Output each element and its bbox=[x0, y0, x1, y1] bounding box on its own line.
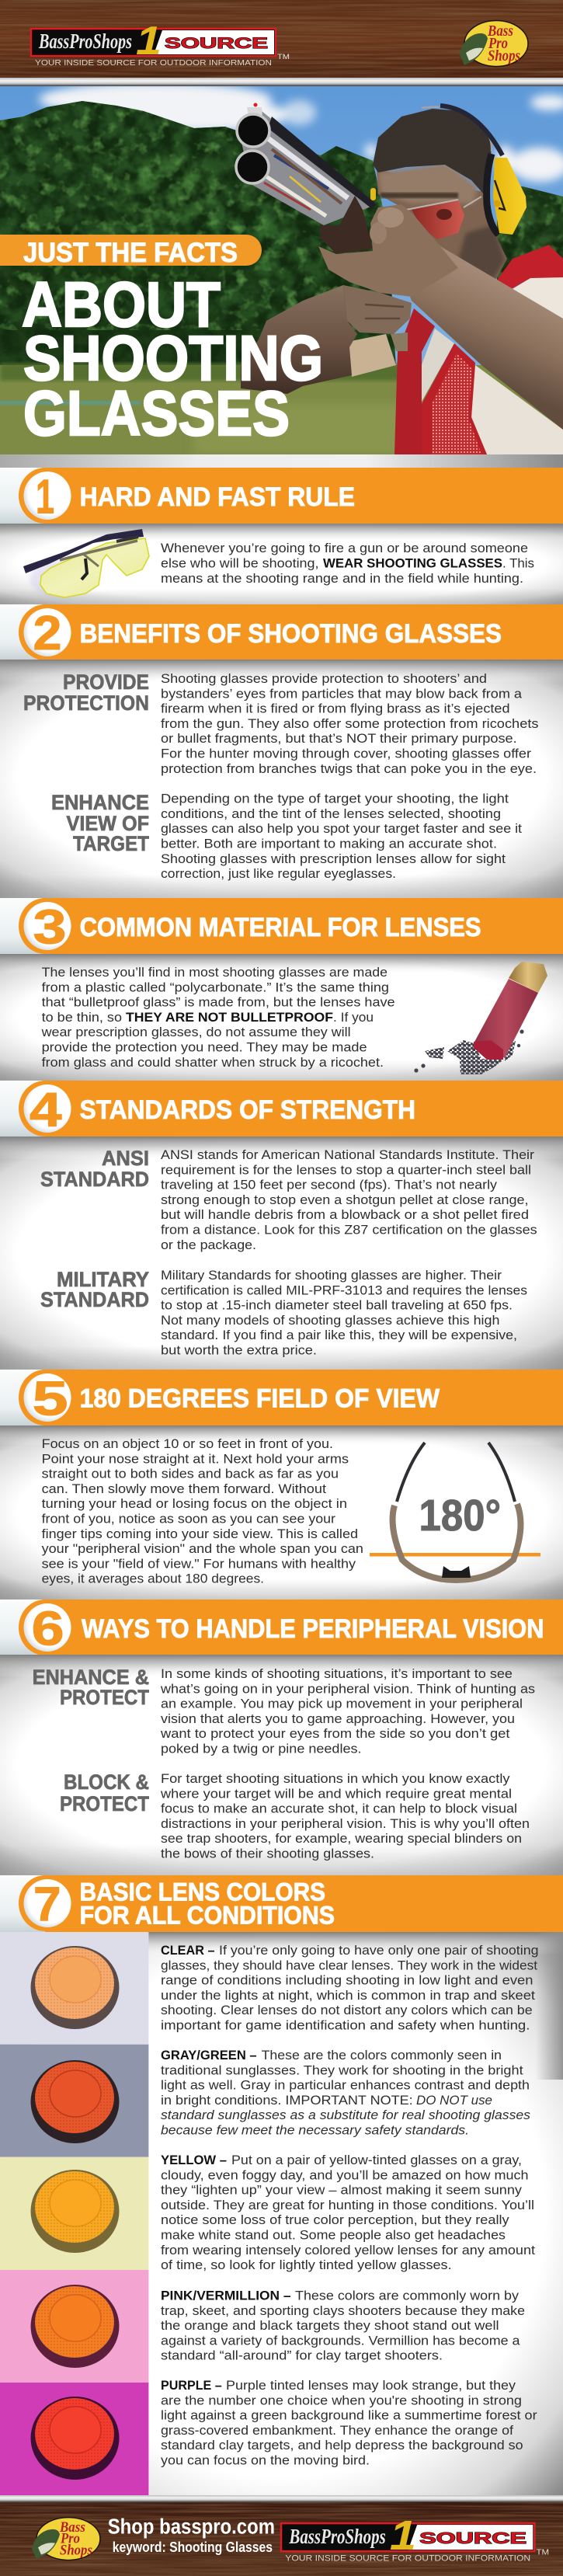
icon: top view of glasses showing 180 degrees: 180° bbox=[419, 1491, 501, 1540]
text block: purple: Purple tinted lenses may look strange, but they bbox=[226, 2379, 516, 2393]
header wood banner bbox=[0, 0, 563, 78]
section 7 heading: basic lens colors for all conditions: FOR ALL CONDITIONS bbox=[80, 1902, 335, 1930]
shooter head with ear protection and glasses bbox=[370, 106, 527, 282]
swatch: yellow bbox=[0, 2157, 148, 2270]
text block: military bbox=[161, 1269, 527, 1358]
text block: yellow: make white stand out. Some people also get headaches bbox=[161, 2228, 506, 2242]
text block: from a plastic called “polycarbonate.” It’s the same thing bbox=[42, 980, 389, 994]
text block: pink vermillion: against a variety of backgrounds. Vermillion has become a bbox=[161, 2334, 520, 2348]
Bass Pro Shops oval logo bbox=[460, 20, 528, 67]
text block: block and protect: see trap shooters, for example, wearing special blinders on bbox=[161, 1832, 522, 1846]
text block: gray green: in bright conditions. IMPORTANT NOTE: bbox=[161, 2094, 413, 2108]
shooter left arm and hand bbox=[241, 285, 412, 394]
text block: enhance view of target: Depending on the type of target your shooting, the light bbox=[161, 792, 509, 806]
panel: common material bbox=[0, 954, 563, 1081]
text block bbox=[161, 541, 534, 586]
text block: enhance view of target: conditions, and the tint of the lenses selected, shooting bbox=[161, 807, 501, 821]
text block: WEAR SHOOTING GLASSES bbox=[323, 556, 502, 570]
text block: purple: standard clay targets, and help depress the background so bbox=[161, 2438, 523, 2452]
Bass Pro Shops 1Source logo: BassProShops bbox=[38, 30, 132, 53]
text block: ansi: or the package. bbox=[161, 1238, 256, 1252]
text block: gray green: light as well. Gray in particular enhances contrast and depth bbox=[161, 2079, 530, 2093]
section 4 heading: standards of strength: STANDARDS OF STRENGTH bbox=[80, 1095, 415, 1125]
text block: that “bulletproof glass” is made from, but the lenses have bbox=[42, 996, 395, 1010]
text block: clear: shooting. Clear lenses do not distort any colors which can be bbox=[161, 2003, 533, 2017]
text block: THEY ARE NOT BULLETPROOF bbox=[126, 1011, 333, 1025]
text block: ansi: ANSI stands for American National Standards Institute. Their bbox=[161, 1148, 535, 1162]
text block: block and protect: the bows of their shooting glasses. bbox=[161, 1847, 374, 1861]
text block: clear: under the lights at night, which is common in trap and skeet bbox=[161, 1989, 535, 2003]
label: block and protect: BLOCK & bbox=[64, 1770, 149, 1794]
section 1 heading: hard and fast rule: 1 bbox=[36, 471, 54, 524]
footer Bass Pro Shops oval logo bbox=[32, 2518, 100, 2560]
text block: clear: glasses, they should have clear lenses. They work in the widest bbox=[161, 1958, 537, 1972]
Bass Pro Shops 1Source logo: 1 bbox=[136, 19, 162, 64]
text block: enhance and protect: want to protect your eyes from the side so you don’t get bbox=[160, 1727, 510, 1741]
text block: military: standard. If you find a pair like this, they will be expensive, bbox=[161, 1328, 517, 1342]
panel: benefits bbox=[0, 660, 563, 898]
swatch: purple bbox=[0, 2383, 148, 2495]
text block: else who will be shooting, bbox=[161, 556, 318, 570]
label: military standard: MILITARY bbox=[57, 1268, 149, 1291]
panel: field of view bbox=[0, 1426, 563, 1600]
section 3 heading: common material for lenses: COMMON MATERIAL FOR LENSES bbox=[80, 913, 481, 942]
footer 1Source logo: 1 bbox=[390, 2512, 416, 2559]
label: enhance and protect: PROTECT bbox=[60, 1686, 149, 1709]
text block: military: to stop at .15-inch diameter steel ball traveling at 650 fps. bbox=[161, 1299, 513, 1313]
text block: purple bbox=[161, 2379, 537, 2467]
icon: yellow shooting glasses bbox=[23, 529, 149, 597]
text block: enhance and protect: an example. You may pick up movement in your peripheral bbox=[161, 1697, 523, 1711]
text block: enhance and protect: vision that alerts you to game approaching. However, you bbox=[161, 1712, 515, 1726]
text block: yellow: from wearing intensely colored yellow lenses for any amount bbox=[161, 2244, 535, 2257]
section 2 heading: benefits of shooting glasses bbox=[0, 604, 563, 660]
text block bbox=[42, 1437, 363, 1586]
text block: yellow: notice some loss of true color perception, but they really bbox=[161, 2213, 509, 2227]
text block: gray green: These are the colors commonly seen in bbox=[262, 2049, 502, 2063]
Bass Pro Shops 1Source logo bbox=[31, 19, 290, 68]
text block: gray green: DO NOT use bbox=[416, 2094, 492, 2108]
text block: enhance view of target: glasses can also help you spot your target faster and see it bbox=[161, 822, 522, 836]
text block: clear bbox=[161, 1944, 539, 2032]
swatch: clear bbox=[0, 1932, 148, 2045]
just the facts pill: JUST THE FACTS bbox=[23, 238, 238, 268]
footer wood banner bbox=[0, 2502, 563, 2576]
text block: gray green bbox=[161, 2049, 530, 2138]
footer 1Source logo: BassProShops bbox=[289, 2525, 386, 2549]
Bass Pro Shops 1Source logo: SOURCE bbox=[165, 35, 268, 52]
footer Bass Pro Shops oval logo: Shops bbox=[60, 2543, 92, 2558]
text block: provide the protection you need. They may be made bbox=[42, 1041, 367, 1055]
text block: gray green: because few meet the necessary safety standards. bbox=[161, 2124, 469, 2138]
label: enhance view of target: TARGET bbox=[73, 832, 149, 855]
text block: ansi bbox=[161, 1148, 537, 1252]
text block: means at the shooting range and in the field while hunting. bbox=[161, 572, 523, 586]
footer 1Source logo bbox=[281, 2512, 549, 2564]
text block: Point your nose straight at it. Next hold your arms bbox=[42, 1452, 349, 1466]
panel: peripheral vision bbox=[0, 1655, 563, 1875]
section 4 heading: standards of strength bbox=[0, 1081, 563, 1137]
text block: provide protection: firearm when it is fired or from flying brass as it’s ejected bbox=[161, 702, 509, 716]
text block: military: Not many models of shooting glasses achieve this high bbox=[161, 1314, 500, 1328]
text block: military: certification is called MIL-PRF-31013 and requires the lenses bbox=[161, 1283, 527, 1297]
text block: yellow: YELLOW – bbox=[161, 2153, 227, 2167]
text block: . If you bbox=[333, 1011, 374, 1025]
section 1 heading: hard and fast rule: HARD AND FAST RULE bbox=[80, 482, 355, 512]
text block: clear: CLEAR – bbox=[161, 1944, 214, 1958]
text block: block and protect: distractions in your peripheral vision. This is why you’ll often bbox=[161, 1817, 530, 1831]
text block: clear: If you’re only going to have only one pair of shooting bbox=[219, 1944, 539, 1958]
text block: purple: light against a green background like a summertime forest or bbox=[161, 2409, 537, 2423]
text block: pink vermillion: PINK/VERMILLION – bbox=[161, 2289, 290, 2303]
section 5 heading: 180 degrees field of view bbox=[0, 1370, 563, 1426]
label: military standard: STANDARD bbox=[40, 1288, 149, 1311]
text block: yellow: they “lighten up” your view – almost making it seem sunny bbox=[161, 2184, 523, 2198]
text block: wear prescription glasses, do not assume they will bbox=[41, 1025, 351, 1039]
Bass Pro Shops oval logo: Pro bbox=[488, 35, 508, 52]
Bass Pro Shops oval logo: Bass bbox=[487, 23, 513, 40]
text block: ansi: strong enough to stop even a shotgun pellet at close range, bbox=[161, 1193, 528, 1207]
text block: ansi: from a distance. Look for this Z87 certification on the glasses bbox=[161, 1223, 537, 1237]
text block: . This bbox=[502, 556, 534, 570]
icon: shotgun shell and pellets bbox=[414, 962, 547, 1074]
label: enhance view of target bbox=[51, 791, 149, 855]
panel: standards bbox=[0, 1137, 563, 1370]
text block: your "peripheral vision" and the whole span you can bbox=[42, 1542, 363, 1556]
Bass Pro Shops 1Source logo: TM bbox=[277, 53, 290, 61]
section 7 heading: basic lens colors for all conditions: 7 bbox=[33, 1878, 61, 1931]
panel: hard and fast rule bbox=[0, 524, 563, 604]
label: ansi standard: ANSI bbox=[102, 1147, 149, 1170]
text block: to be thin, so bbox=[42, 1011, 122, 1025]
text block: ansi: but will handle debris from a blowback or a shot pellet fired bbox=[161, 1208, 529, 1222]
text block: enhance and protect: poked by a twig or pine needles. bbox=[161, 1742, 362, 1756]
text block: military: Military Standards for shooting glasses are higher. Their bbox=[161, 1269, 502, 1283]
section 7 heading: basic lens colors for all conditions: BASIC LENS COLORS bbox=[80, 1878, 325, 1906]
shooter torso and vest bbox=[347, 245, 563, 454]
shotgun barrels bbox=[236, 103, 377, 254]
panel: lens colors bbox=[0, 1932, 563, 2495]
label: provide protection: PROVIDE bbox=[63, 670, 149, 694]
section 6 heading: ways to handle peripheral vision bbox=[0, 1600, 563, 1656]
Bass Pro Shops oval logo: Shops bbox=[488, 47, 520, 64]
text block: The lenses you’ll find in most shooting glasses are made bbox=[42, 966, 387, 980]
swatch: gray green bbox=[0, 2045, 148, 2157]
text block: yellow: Put on a pair of yellow-tinted glasses on a gray, bbox=[231, 2153, 522, 2167]
text block: Whenever you’re going to fire a gun or be around someone bbox=[161, 541, 528, 555]
label: ansi standard bbox=[40, 1147, 149, 1191]
text block: pink vermillion: the orange and black targets they shoot stand out well bbox=[161, 2319, 499, 2333]
text block: clear: range of conditions including shooting in low light and even bbox=[161, 1974, 533, 1988]
section 6 heading: ways to handle peripheral vision: 6 bbox=[32, 1602, 64, 1656]
text block: enhance and protect bbox=[160, 1667, 535, 1756]
text block: gray green: traditional sunglasses. They work for shooting in the bright bbox=[161, 2063, 523, 2077]
text block: can. Then slowly move them forward. Without bbox=[42, 1482, 326, 1496]
text block: purple: you can focus on the moving bird. bbox=[161, 2453, 370, 2467]
text block: provide protection: or bullet fragments, but that’s NOT their primary purpose. bbox=[161, 732, 517, 746]
section 1 heading: hard and fast rule bbox=[0, 468, 563, 524]
text block: enhance and protect: In some kinds of shooting situations, it’s important to see bbox=[161, 1667, 513, 1681]
text block: Focus on an object 10 or so feet in front of you. bbox=[42, 1437, 333, 1451]
footer 1Source logo: YOUR INSIDE SOURCE FOR OUTDOOR INFORMATION bbox=[285, 2554, 530, 2564]
text block: enhance view of target: correction, just like regular eyeglasses. bbox=[161, 867, 396, 881]
icon: top view of glasses showing 180 degrees bbox=[370, 1443, 540, 1580]
footer call to action bbox=[108, 2514, 275, 2555]
text block: gray green: standard sunglasses as a substitute for real shooting glasses bbox=[161, 2108, 530, 2122]
footer call to action: Shop basspro.com bbox=[108, 2514, 275, 2539]
text block: purple: are the number one choice when you're shooting in strong bbox=[161, 2393, 522, 2407]
footer 1Source logo: SOURCE bbox=[419, 2530, 527, 2547]
text block: block and protect: focus to make an accurate shot, it can help to block visual bbox=[161, 1802, 517, 1816]
label: enhance and protect bbox=[33, 1666, 149, 1709]
text block: yellow: outside. They are great for hunting in those conditions. You’ll bbox=[161, 2198, 534, 2212]
text block: block and protect: For target shooting situations in which you know exactly bbox=[161, 1772, 510, 1786]
text block: provide protection: bystanders’ eyes from particles that may blow back from a bbox=[161, 687, 523, 701]
text block: clear: important for game identification and safety when hunting. bbox=[161, 2018, 530, 2032]
text block: enhance and protect: what’s going on in your peripheral vision. Think of hunting as bbox=[160, 1682, 535, 1696]
text block: pink vermillion: standard “all-around” for clay target shooters. bbox=[161, 2349, 443, 2363]
footer Bass Pro Shops oval logo: Bass bbox=[59, 2519, 85, 2536]
text block: enhance view of target: Shooting glasses with prescription lenses allow for sight bbox=[161, 852, 506, 866]
label: enhance view of target: VIEW OF bbox=[67, 812, 149, 835]
shooter right hand and forearm bbox=[318, 204, 563, 430]
text block: yellow: cloudy, even foggy day, and you’ll be amazed on how much bbox=[161, 2168, 528, 2182]
Bass Pro Shops 1Source logo: YOUR INSIDE SOURCE FOR OUTDOOR INFORMATION bbox=[35, 58, 272, 68]
text block: pink vermillion: trap, skeet, and sporting clays shooters because they make bbox=[161, 2304, 525, 2318]
text block: purple: PURPLE – bbox=[161, 2379, 222, 2393]
text block: provide protection: For the hunter moving through cover, shooting glasses offer bbox=[161, 747, 532, 761]
footer call to action: keyword: Shooting Glasses bbox=[113, 2539, 273, 2555]
title: ABOUT bbox=[22, 270, 221, 340]
footer 1Source logo: TM bbox=[536, 2548, 549, 2557]
text block: straight out to both sides and back as far as you bbox=[42, 1467, 339, 1481]
title: SHOOTING bbox=[23, 323, 323, 394]
text block: turning your head or losing focus on the object in bbox=[42, 1497, 347, 1511]
text block: provide protection: from the gun. They also offer some protection from ricochets bbox=[161, 717, 539, 731]
label: military standard bbox=[40, 1268, 149, 1311]
text block: enhance view of target bbox=[161, 792, 522, 881]
label: block and protect bbox=[60, 1770, 149, 1815]
text block: ansi: traveling at 150 feet per second (fps). That’s not nearly bbox=[161, 1178, 498, 1192]
section 3 heading: common material for lenses bbox=[0, 898, 563, 954]
text block: ansi: requirement is for the lenses to stop a quarter-inch steel ball bbox=[161, 1163, 531, 1177]
text block: from glass and could shatter when struck by a ricochet. bbox=[42, 1056, 384, 1070]
section 5 heading: 180 degrees field of view: 5 bbox=[33, 1372, 68, 1426]
label: provide protection bbox=[23, 670, 149, 715]
text block: finger tips coming into your side view. This is called bbox=[42, 1527, 358, 1541]
label: enhance view of target: ENHANCE bbox=[51, 791, 149, 814]
footer Bass Pro Shops oval logo: Pro bbox=[60, 2531, 80, 2546]
text block: pink vermillion bbox=[161, 2289, 525, 2363]
section 2 heading: benefits of shooting glasses: BENEFITS OF SHOOTING GLASSES bbox=[80, 619, 502, 649]
text block bbox=[41, 966, 395, 1070]
label: ansi standard: STANDARD bbox=[40, 1168, 149, 1191]
label: provide protection: PROTECTION bbox=[23, 691, 149, 715]
text block: front of you, notice as soon as you can see your bbox=[42, 1512, 336, 1526]
title bbox=[22, 270, 323, 449]
label: enhance and protect: ENHANCE & bbox=[33, 1666, 149, 1689]
text block: see is your "field of view." For humans with healthy bbox=[42, 1557, 356, 1571]
swatch: pink vermillion bbox=[0, 2270, 148, 2383]
text block: provide protection: protection from branches twigs that can poke you in the eye. bbox=[161, 762, 537, 776]
text block: purple: grass-covered embankment. They enhance the orange of bbox=[161, 2424, 513, 2438]
text block: provide protection: Shooting glasses provide protection to shooters’ and bbox=[161, 672, 487, 686]
section 4 heading: standards of strength: 4 bbox=[30, 1083, 62, 1137]
text block: yellow bbox=[161, 2153, 535, 2272]
label: block and protect: PROTECT bbox=[60, 1792, 149, 1815]
title: GLASSES bbox=[23, 378, 290, 449]
section 3 heading: common material for lenses: 3 bbox=[33, 901, 67, 954]
hero photo: shooter aiming shotgun bbox=[0, 82, 563, 454]
section 5 heading: 180 degrees field of view: 180 DEGREES FIELD OF VIEW bbox=[80, 1384, 440, 1414]
text block: military: but worth the extra price. bbox=[161, 1344, 317, 1358]
section 7 heading: basic lens colors for all conditions bbox=[0, 1875, 563, 1932]
text block: block and protect bbox=[160, 1772, 530, 1861]
text block: eyes, it averages about 180 degrees. bbox=[42, 1572, 264, 1586]
text block: block and protect: where your target will be and which require great mental bbox=[160, 1787, 512, 1801]
section 2 heading: benefits of shooting glasses: 2 bbox=[33, 607, 62, 660]
text block: pink vermillion: These colors are commonly worn by bbox=[295, 2289, 520, 2303]
text block: enhance view of target: better. Both are important to making an accurate shot. bbox=[161, 837, 497, 851]
text block: gray green: GRAY/GREEN – bbox=[161, 2049, 257, 2063]
text block: provide protection bbox=[161, 672, 539, 776]
text block: yellow: of time, so look for lightly tinted yellow glasses. bbox=[161, 2258, 452, 2272]
